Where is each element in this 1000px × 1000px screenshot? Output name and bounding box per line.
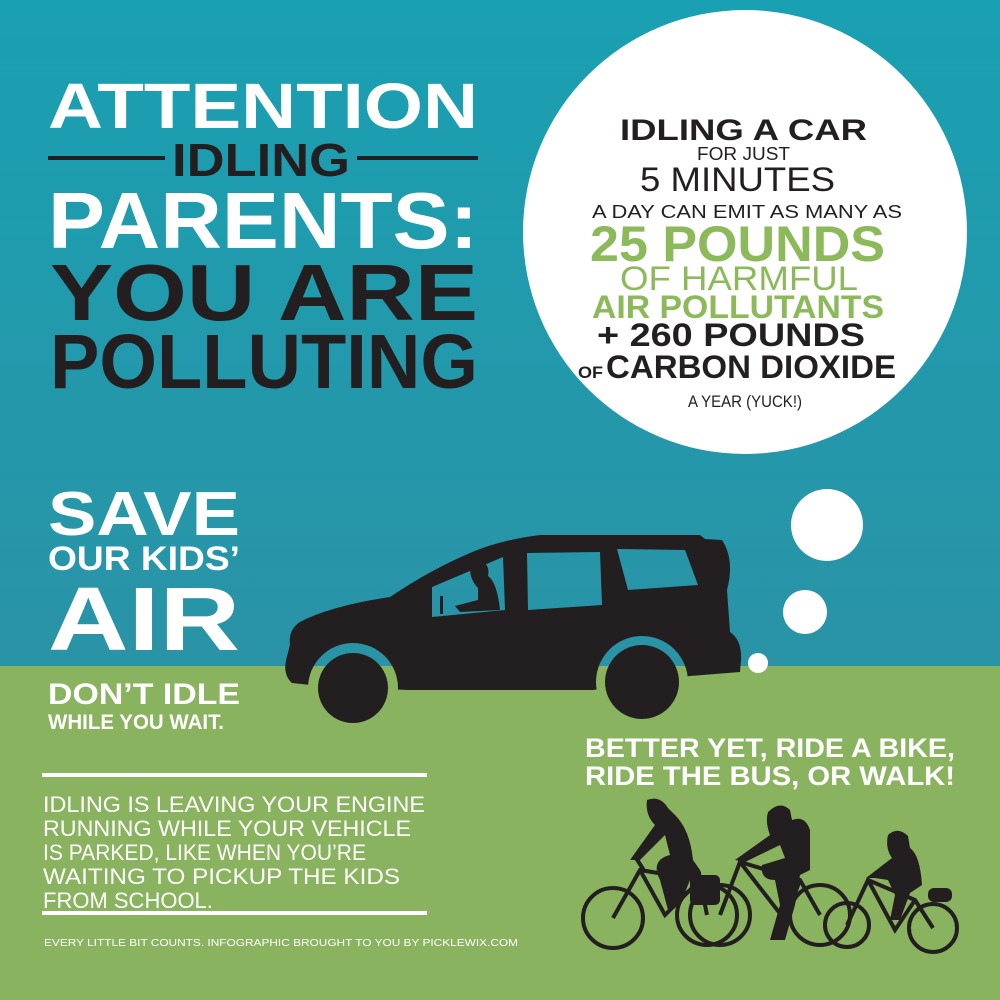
thought bubble: statistic: 25 POUNDS [590, 216, 885, 272]
bike: boy [690, 805, 850, 945]
footer credit: EVERY LITTLE BIT COUNTS. INFOGRAPHIC BROUGHT TO YOU BY PICKLEWIX.COM [44, 938, 518, 949]
headline: save our kids' air: DON’T IDLE [48, 678, 240, 711]
definition text block [42, 773, 427, 915]
title: IDLING [172, 134, 350, 186]
definition text block: FROM SCHOOL. [43, 888, 213, 913]
definition text block: RUNNING WHILE YOUR VEHICLE [43, 816, 411, 841]
thought bubble: statistic: A YEAR (YUCK!) [688, 392, 802, 411]
car silhouette [285, 535, 741, 723]
title: YOU ARE [50, 248, 478, 337]
subheading: better yet: BETTER YET, RIDE A BIKE, [585, 733, 955, 763]
subheading: better yet: RIDE THE BUS, OR WALK! [585, 761, 955, 791]
thought bubble: statistic: OF [578, 363, 603, 382]
definition text block: WAITING TO PICKUP THE KIDS [43, 864, 400, 889]
cyclists silhouettes [583, 799, 957, 952]
headline: save our kids' air: WHILE YOU WAIT. [48, 711, 224, 734]
title: POLLUTING [50, 319, 478, 405]
thought bubble: statistic [523, 10, 967, 454]
background: sky [0, 0, 1000, 666]
subheading: better yet [585, 733, 955, 791]
headline: save our kids' air: AIR [48, 570, 240, 670]
thought bubble: statistic: AIR POLLUTANTS [592, 289, 884, 325]
thought bubble: statistic: 5 MINUTES [640, 161, 835, 199]
title [48, 70, 478, 405]
thought bubble: statistic: FOR JUST [697, 144, 790, 164]
bike: woman [583, 799, 737, 948]
headline: save our kids' air: OUR KIDS’ [48, 540, 240, 578]
title: PARENTS: [48, 176, 478, 265]
headline: save our kids' air [48, 480, 240, 734]
background: grass [0, 666, 1000, 1000]
thought bubble: statistic: CARBON DIOXIDE [606, 349, 896, 385]
definition text block: IS PARKED, LIKE WHEN YOU’RE [43, 840, 366, 865]
headline: save our kids' air: SAVE [48, 480, 240, 549]
definition text block: IDLING IS LEAVING YOUR ENGINE [43, 792, 425, 817]
bike: girl [825, 831, 957, 952]
thought bubble: statistic: IDLING A CAR [620, 114, 867, 147]
title: ATTENTION [48, 70, 478, 142]
thought bubble: statistic: + 260 POUNDS [597, 317, 865, 353]
thought bubble trail [748, 489, 863, 673]
thought bubble: statistic: A DAY CAN EMIT AS MANY AS [592, 202, 902, 222]
thought bubble: statistic: OF HARMFUL [620, 260, 858, 298]
